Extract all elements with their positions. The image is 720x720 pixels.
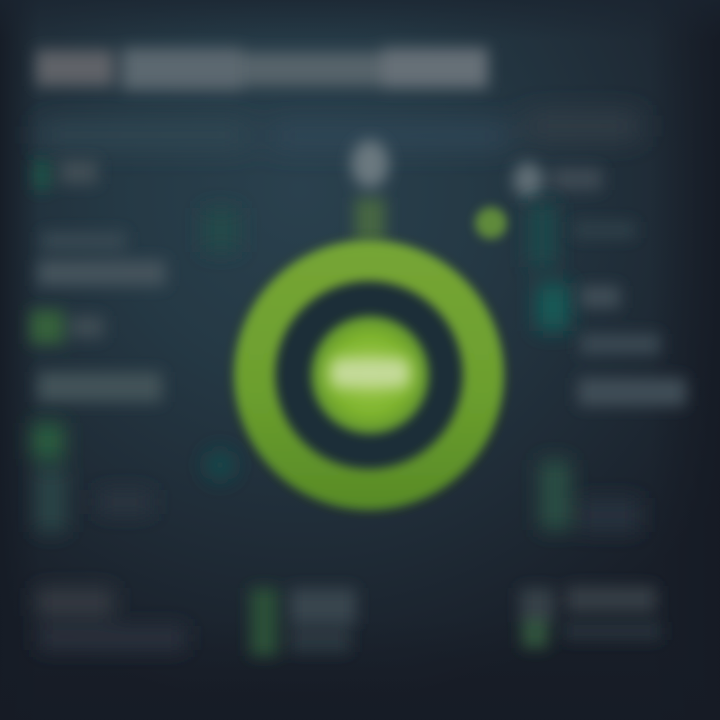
right column labels bbox=[573, 222, 686, 406]
top right node and label bbox=[513, 162, 602, 198]
left column: label group 3 bbox=[32, 423, 152, 532]
left column: label group 1 bbox=[34, 160, 166, 286]
title bbox=[36, 48, 488, 90]
top centre node bbox=[351, 140, 389, 242]
orb highlight label bbox=[330, 358, 410, 388]
teal accents bbox=[203, 203, 570, 480]
left column: label group 2 bbox=[30, 310, 162, 402]
bottom centre text block bbox=[250, 588, 356, 656]
small green dot bbox=[475, 207, 507, 239]
right column green bars bbox=[540, 460, 640, 532]
central green orb bbox=[311, 316, 429, 434]
green ring gauge bbox=[253, 259, 485, 491]
bottom right text block bbox=[520, 586, 661, 648]
subtitle bbox=[40, 114, 640, 146]
bottom left text block bbox=[36, 588, 186, 650]
